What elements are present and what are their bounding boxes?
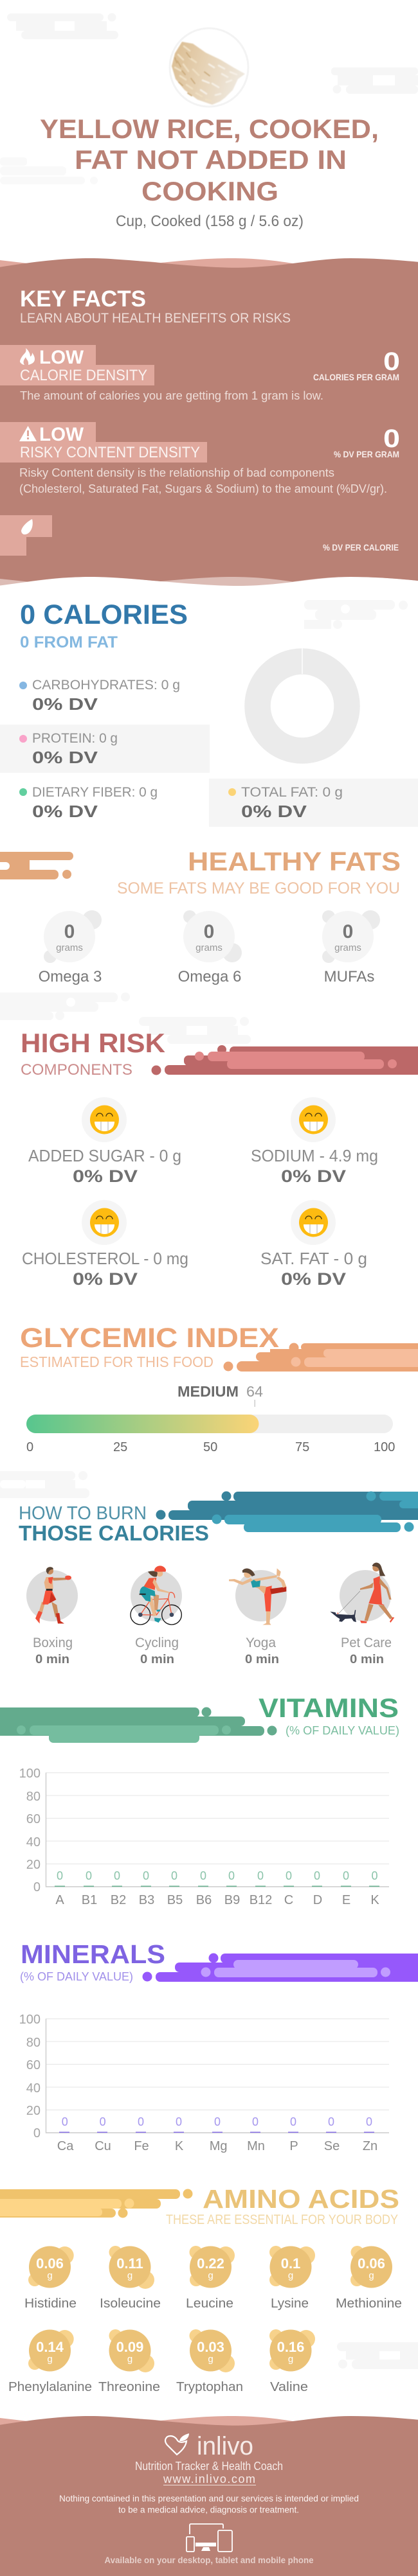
heading line 1: HOW TO BURN [19,1503,147,1524]
item: sodium [251,1097,378,1186]
icon: yoga pose [229,1568,286,1625]
item: valine: Valine [270,2380,308,2394]
website link: www.inlivo.com [163,2473,255,2485]
row: carbohydrates: 0% DV [32,694,98,714]
item: saturated fat: 0% DV [281,1269,346,1289]
item: histidine: Histidine [24,2297,77,2311]
item: added sugar [28,1097,181,1186]
row: protein [19,731,118,767]
bar chart: minerals: 0 [62,2115,68,2128]
bar chart: vitamins: B5 [167,1893,183,1907]
tagline: Nutrition Tracker & Health Coach [135,2460,283,2473]
panel: key facts [0,258,418,586]
panel: healthy fats [0,847,401,985]
item: cholesterol: CHOLESTEROL - 0 mg [22,1249,188,1268]
band: protein and fat rows [0,725,418,827]
row: dietary fiber: 0% DV [32,802,98,821]
decoration: red streaks [152,1045,418,1075]
panel: amino acids [0,2184,402,2394]
label: low: LOW [39,424,84,445]
omega 3: 0 [64,921,75,942]
bar chart: minerals: 0 [176,2115,182,2128]
bar chart: vitamins: A [55,1893,64,1907]
bar chart: vitamins: 0 [314,1869,320,1882]
disclaimer: to be a medical advice, diagnosis or treatment. [118,2504,299,2514]
bar chart: vitamins: C [284,1893,293,1907]
bar chart: vitamins: 0 [143,1869,149,1882]
bar chart: vitamins: 60 [26,1812,41,1826]
activity: cycling: 0 min [140,1653,174,1666]
activity: yoga [229,1568,287,1666]
icon: warning [19,426,37,441]
calorie density description: The amount of calories you are getting from 1 gram is low. [20,389,323,402]
item: phenylalanine: g [47,2354,53,2365]
subheading: ESTIMATED FOR THIS FOOD [20,1354,214,1370]
bar chart: vitamins: D [313,1893,322,1907]
background cloud: amino acids [337,2342,418,2369]
icon: cyclist [131,1566,181,1625]
bar chart: minerals: 80 [26,2036,41,2050]
item: lysine: 0.1 [281,2255,300,2272]
bar chart: minerals: Cu [95,2139,111,2153]
bar chart: minerals: Zn [363,2139,377,2153]
item: histidine [24,2246,77,2311]
label: risky content density: RISKY CONTENT DENSITY [20,444,200,461]
panel: glycemic index [20,1323,418,1454]
item: sodium: SODIUM - 4.9 mg [251,1146,378,1165]
label: calorie density: CALORIE DENSITY [20,367,147,384]
bar chart: minerals: 100 [19,2013,41,2027]
bar chart: minerals: 0 [214,2115,221,2128]
dv per gram value: 0 [383,425,400,453]
mufas: grams [334,942,361,953]
gi gauge: 100 [374,1440,395,1454]
gi gauge: 0 [26,1440,33,1454]
bar chart: vitamins: B2 [111,1893,126,1907]
item: histidine: 0.06 [36,2255,64,2272]
item: methionine: 0.06 [358,2255,385,2272]
row: total fat: TOTAL FAT: 0 g [241,785,343,800]
item: isoleucine: Isoleucine [100,2297,161,2311]
panel: high risk components [21,1028,418,1289]
subheading: SOME FATS MAY BE GOOD FOR YOU [117,879,400,897]
bar chart: vitamins: K [370,1893,379,1907]
background cloud: burn [0,1471,89,1498]
item: leucine [186,2246,235,2311]
disclaimer: Nothing contained in this presentation and our services is intended or implied [59,2493,359,2503]
activity: pet care: Pet Care [341,1636,392,1650]
activity: cycling [131,1566,182,1666]
item: sodium: 0% DV [281,1167,346,1186]
item: cholesterol [22,1200,188,1289]
item: cholesterol: 0% DV [73,1269,138,1289]
bar chart: vitamins: 0 [171,1869,177,1882]
bar chart: minerals: Fe [134,2139,149,2153]
item: lysine: g [288,2270,293,2281]
background clouds: header [0,13,418,184]
bar chart: minerals: Ca [57,2139,74,2153]
item: valine: 0.16 [277,2339,304,2355]
mufas: MUFAs [324,968,374,985]
item: lysine: Lysine [271,2297,309,2311]
heading: healthy fats: HEALTHY FATS [188,847,401,876]
label: low: LOW [39,347,84,368]
bar chart: vitamins: 0 [86,1869,92,1882]
decoration: orange streaks [0,852,73,879]
gi rating: MEDIUM [177,1383,239,1400]
bar chart: vitamins: B1 [82,1893,97,1907]
item: threonine: g [127,2354,132,2365]
nutrient density badge [0,515,52,556]
risky content description: Risky Content density is the relationship of bad components [19,466,334,479]
gi gauge: 50 [203,1440,217,1454]
item: histidine: g [47,2270,53,2281]
bar chart: vitamins [19,1767,389,1907]
gi gauge [26,1415,395,1454]
title [40,114,379,206]
calories per gram value: 0 [383,348,400,376]
bar chart: vitamins: 0 [33,1880,41,1894]
title: COOKING [141,176,278,206]
logo: inlivo [165,2432,253,2460]
omega 3 [39,910,102,985]
item: threonine: Threonine [98,2380,160,2394]
background clouds: high risk [0,992,251,1044]
bar chart: vitamins: 0 [286,1869,292,1882]
panel: footer [0,2416,418,2576]
panel: vitamins [0,1693,399,1907]
bar chart: vitamins: 0 [228,1869,235,1882]
subheading: (% OF DAILY VALUE) [286,1724,399,1737]
mufas: 0 [343,921,353,942]
omega 3: grams [56,942,83,953]
row: carbohydrates: CARBOHYDRATES: 0 g [32,678,180,693]
subheading: components: COMPONENTS [21,1061,132,1079]
bar chart: minerals: 0 [33,2126,41,2140]
row: protein: 0% DV [32,748,98,767]
item: phenylalanine [8,2329,92,2394]
risky content description: (Cholesterol, Saturated Fat, Sugars & Sodium) to the amount (%DV/gr). [19,482,387,495]
item: methionine: g [368,2270,374,2281]
bar chart: minerals: 0 [366,2115,372,2128]
item: isoleucine [100,2246,161,2311]
panel: how to burn those calories [19,1492,418,1666]
subheading: LEARN ABOUT HEALTH BENEFITS OR RISKS [20,311,291,326]
bar chart: vitamins: 0 [57,1869,63,1882]
calorie density badge [0,345,154,385]
bar chart: minerals: Mg [210,2139,227,2153]
row: dietary fiber [19,785,158,821]
item: tryptophan: Tryptophan [176,2380,243,2394]
icon: devices [186,2524,232,2552]
bar chart: vitamins: B3 [139,1893,154,1907]
row: dietary fiber: DIETARY FIBER: 0 g [32,785,158,800]
bar chart: minerals: 60 [26,2058,41,2072]
bar chart: vitamins: 0 [343,1869,349,1882]
disclaimer [59,2493,359,2514]
food image: rice in a ring [170,28,248,107]
dv per calorie label: % DV PER CALORIE [323,542,399,552]
gi gauge: 75 [295,1440,309,1454]
bar chart: minerals [19,2013,389,2153]
panel: minerals [19,1939,418,2153]
bar chart: vitamins: B9 [224,1893,240,1907]
row: carbohydrates [19,678,180,714]
item: tryptophan: g [208,2354,214,2365]
bar chart: minerals: P [289,2139,298,2153]
panel: calories [0,599,418,827]
item: methionine: Methionine [336,2297,402,2311]
title: YELLOW RICE, COOKED, [40,114,379,144]
bar chart: vitamins: 20 [26,1858,41,1872]
bar chart: minerals: 0 [328,2115,334,2128]
decoration: teal streaks [156,1492,418,1532]
bar chart: minerals: K [175,2139,184,2153]
item: threonine: 0.09 [116,2339,143,2355]
subheading: (% OF DAILY VALUE) [20,1970,133,1983]
icon: woman walking dog [330,1562,394,1623]
row: total fat [228,785,343,821]
icon: boxer [35,1567,71,1623]
risky content description [19,466,387,495]
item: isoleucine: g [127,2270,132,2281]
bar chart: minerals: Mn [247,2139,265,2153]
bar chart: minerals: 0 [290,2115,296,2128]
item: leucine: g [208,2270,214,2281]
omega 6: Omega 6 [178,968,241,985]
omega 3: Omega 3 [39,968,102,985]
title: FAT NOT ADDED IN [75,145,347,175]
bar chart: vitamins: 100 [19,1767,41,1781]
item: valine [269,2329,315,2394]
donut chart [257,648,347,750]
bar chart: vitamins: 80 [26,1790,41,1804]
activity: cycling: Cycling [135,1636,179,1650]
omega 6: 0 [204,921,214,942]
icon: flame [20,348,35,365]
calories per gram value [313,348,400,382]
calories per gram value: CALORIES PER GRAM [313,372,399,382]
decoration: yellow streaks [0,2189,193,2218]
item: saturated fat [260,1200,367,1289]
availability note: Available on your desktop, tablet and mobile phone [104,2555,314,2565]
bar chart: vitamins: 0 [114,1869,120,1882]
heading: amino acids: AMINO ACIDS [203,2184,399,2214]
item: added sugar: 0% DV [73,1167,138,1186]
item: phenylalanine: 0.14 [36,2339,64,2355]
activity: boxing [26,1567,78,1666]
bar chart: vitamins: B12 [250,1893,272,1907]
item: valine: g [288,2354,293,2365]
omega 6: grams [195,942,223,953]
heading line 2: THOSE CALORIES [19,1521,209,1545]
decoration: purple streaks [143,1953,418,1982]
heading: high risk: HIGH RISK [21,1028,165,1058]
bar chart: vitamins: 0 [371,1869,378,1882]
item: phenylalanine: Phenylalanine [8,2380,92,2394]
bar chart: vitamins: E [342,1893,350,1907]
gi gauge: 25 [113,1440,127,1454]
mufas [322,910,380,985]
item: saturated fat: SAT. FAT - 0 g [260,1249,367,1268]
activity: boxing: Boxing [33,1636,73,1650]
bar chart: vitamins: 40 [26,1835,41,1849]
heading: vitamins: VITAMINS [259,1693,399,1723]
icon: leaf [21,519,33,534]
item: isoleucine: 0.11 [116,2255,143,2272]
decoration: orange streaks [224,1343,418,1372]
item: threonine [98,2329,160,2394]
item: tryptophan [176,2329,243,2394]
subheading: from fat: 0 FROM FAT [20,633,118,651]
heading: minerals: MINERALS [21,1939,165,1969]
heading: calories: 0 CALORIES [20,599,188,630]
activity: pet care [330,1562,394,1666]
item: tryptophan: 0.03 [197,2339,224,2355]
item: added sugar: ADDED SUGAR - 0 g [28,1146,181,1165]
bar chart: minerals: 40 [26,2081,41,2095]
heading: glycemic index: GLYCEMIC INDEX [20,1323,279,1354]
activity: yoga: Yoga [246,1636,276,1650]
bar chart: minerals: Se [324,2139,340,2153]
logo: inlivo: inlivo [197,2432,253,2460]
risky content badge [0,422,207,463]
activity: boxing: 0 min [35,1653,69,1666]
dv per gram value: % DV PER GRAM [334,449,399,459]
omega 6 [178,910,242,985]
dv per gram value [334,425,400,459]
heading: key facts: KEY FACTS [20,287,146,312]
serving size: Cup, Cooked (158 g / 5.6 oz) [116,213,304,230]
bar chart: vitamins: 0 [200,1869,206,1882]
gi rating: 64 [246,1383,263,1400]
bar chart: vitamins: B6 [196,1893,212,1907]
bar chart: minerals: 0 [138,2115,144,2128]
row: protein: PROTEIN: 0 g [32,731,118,746]
row: total fat: 0% DV [241,802,307,821]
bar chart: vitamins: 0 [257,1869,264,1882]
background cloud: calories [304,600,408,629]
decoration: green streaks [0,1707,277,1743]
gi rating [177,1383,263,1407]
item: leucine: Leucine [186,2297,233,2311]
activity: yoga: 0 min [245,1653,279,1666]
bar chart: minerals: 20 [26,2104,41,2118]
bar chart: minerals: 0 [100,2115,106,2128]
item: methionine [336,2246,402,2311]
activity: pet care: 0 min [350,1653,384,1666]
item: lysine [269,2246,315,2311]
bar chart: minerals: 0 [252,2115,259,2128]
item: leucine: 0.22 [197,2255,224,2272]
